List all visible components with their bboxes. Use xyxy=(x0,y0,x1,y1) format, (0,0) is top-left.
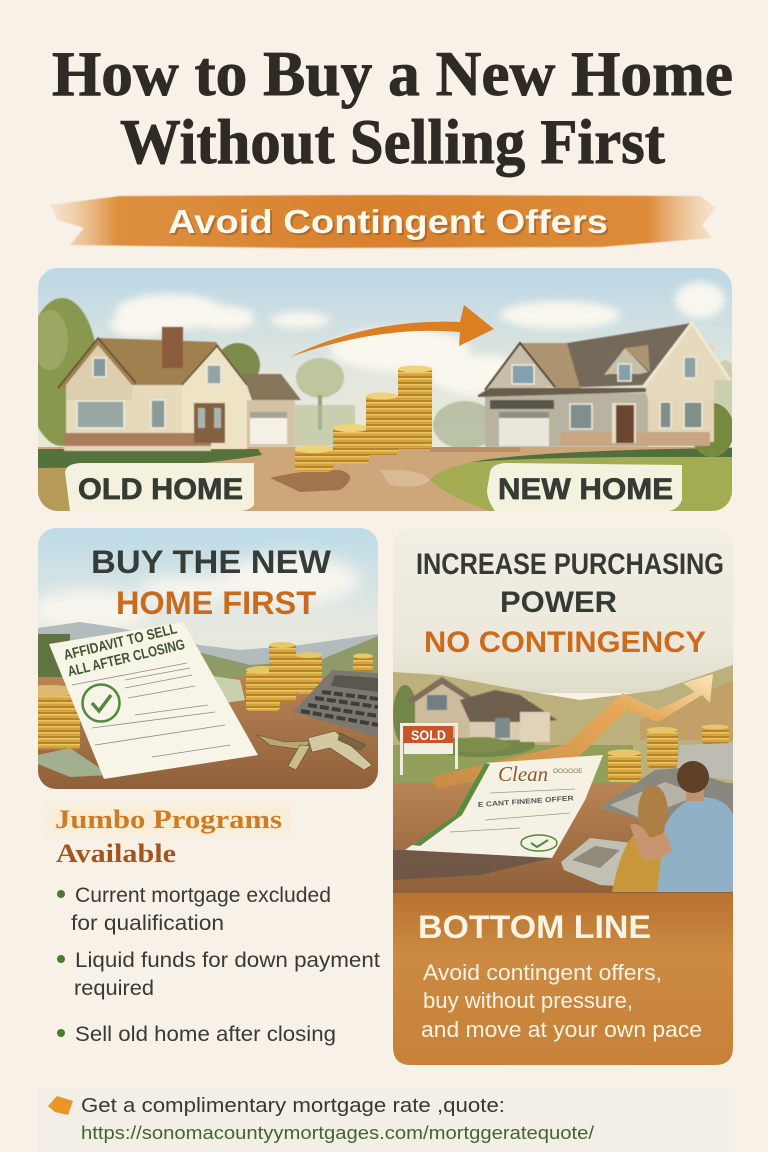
couple xyxy=(612,761,733,892)
coins xyxy=(22,642,373,750)
sold sign xyxy=(400,723,458,775)
subtitle banner xyxy=(50,195,716,248)
label: new home: NEW HOME xyxy=(498,473,673,506)
clean offer document: OOOOOE xyxy=(553,768,583,775)
panel: increase purchasing power xyxy=(393,528,733,1065)
new house xyxy=(478,323,730,447)
old house xyxy=(58,327,301,451)
panel heading: BUY THE NEW xyxy=(91,544,332,580)
bullet list: Liquid funds for down payment xyxy=(75,949,380,972)
heading: jumbo programs: Available xyxy=(56,839,176,868)
icon: orange tag xyxy=(48,1096,73,1115)
title: Without Selling First xyxy=(120,107,665,177)
sold sign: SOLD xyxy=(411,728,446,743)
houses xyxy=(405,677,557,753)
ground xyxy=(38,403,734,511)
bullet list: Sell old home after closing xyxy=(75,1023,336,1046)
panel: buy the new home first xyxy=(22,528,378,789)
label: new home xyxy=(487,463,682,511)
bottom line block xyxy=(393,893,733,1065)
bullet list: for qualification xyxy=(71,912,224,935)
panel heading: POWER xyxy=(500,586,617,619)
footer callout: Get a complimentary mortgage rate ,quote: xyxy=(81,1095,505,1117)
coins xyxy=(608,724,729,782)
panel heading: NO CONTINGENCY xyxy=(424,626,706,659)
panel heading xyxy=(91,544,332,621)
growth arrow xyxy=(432,674,713,789)
bullet list: required xyxy=(74,977,154,1000)
footer callout xyxy=(38,1088,735,1152)
bullet list xyxy=(57,884,380,1046)
subtitle banner: Avoid Contingent Offers xyxy=(168,203,608,240)
clean offer document xyxy=(405,755,603,858)
heading: jumbo programs: Jumbo Programs xyxy=(55,805,282,834)
footer callout: https://sonomacountyymortgages.com/mortggeratequote/ xyxy=(81,1123,594,1143)
heading: jumbo programs xyxy=(46,805,291,868)
bottom line block: and move at your own pace xyxy=(421,1017,702,1042)
money xyxy=(38,748,102,777)
trees xyxy=(26,298,739,449)
calculators xyxy=(561,743,733,887)
subtitle banner: Avoid Contingent Offers xyxy=(170,205,610,242)
panel heading: HOME FIRST xyxy=(116,585,316,621)
title: How to Buy a New Home xyxy=(52,39,733,109)
label: old home xyxy=(65,463,254,511)
document: AFFIDAVIT TO SELL xyxy=(62,621,179,664)
title xyxy=(52,39,733,177)
document xyxy=(49,620,258,779)
clean offer document: E CANT FINENE OFFER xyxy=(478,795,574,809)
document: ALL AFTER CLOSING xyxy=(66,637,187,680)
label: old home: OLD HOME xyxy=(78,473,243,506)
hero illustration: old home to new home xyxy=(26,268,739,511)
calculator xyxy=(293,670,378,737)
clean offer document: Clean xyxy=(498,762,548,786)
bullet list: Current mortgage excluded xyxy=(75,884,331,907)
keys xyxy=(257,731,372,770)
coin stacks xyxy=(295,366,432,472)
arrow xyxy=(290,305,494,357)
panel heading xyxy=(416,548,724,659)
bottom line block: Avoid contingent offers, xyxy=(423,960,662,985)
bottom line block: BOTTOM LINE xyxy=(418,909,651,945)
bottom line block: buy without pressure, xyxy=(423,988,633,1013)
table xyxy=(393,783,733,893)
